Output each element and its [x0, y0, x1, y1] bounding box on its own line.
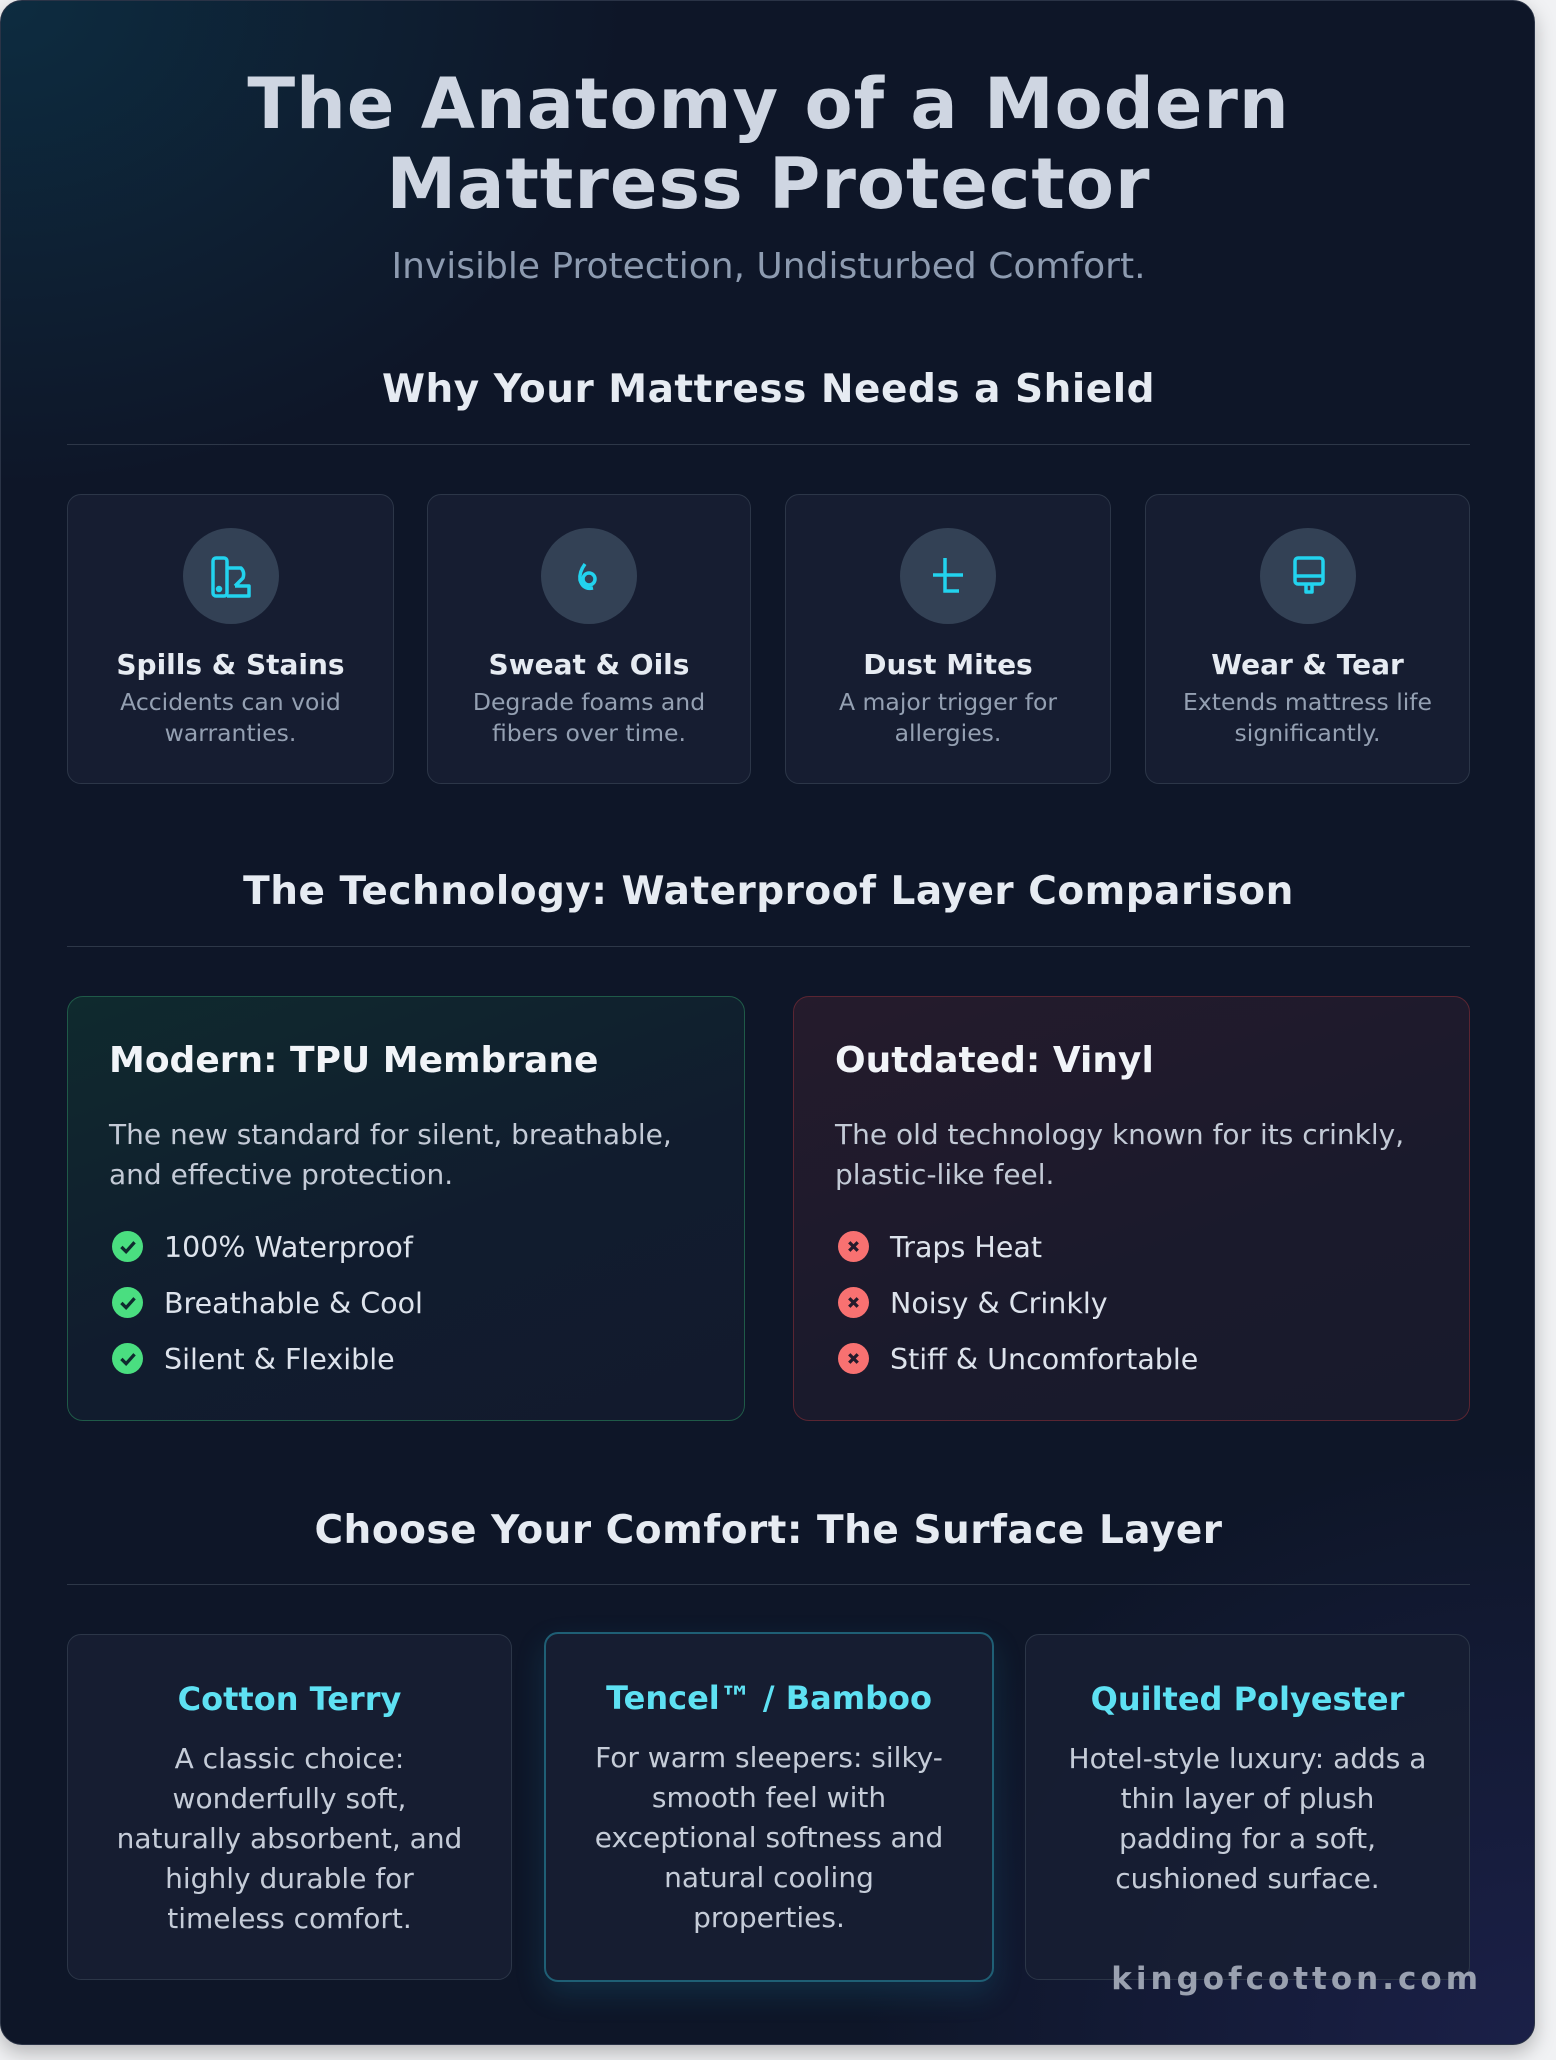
card: wear: significantly.	[1235, 719, 1380, 747]
card: sweat: Degrade foams and	[473, 688, 705, 716]
card: cotton terry: wonderfully soft,	[173, 1782, 406, 1815]
icon: monitor	[1260, 528, 1356, 624]
heading: technology: The Technology: Waterproof Layer Comparison	[243, 869, 1294, 914]
card: dust mites: allergies.	[895, 719, 1001, 747]
card: wear: Wear & Tear	[1211, 648, 1404, 681]
panel: TPU: and effective protection.	[109, 1158, 453, 1191]
heading: comfort: Choose Your Comfort: The Surface Layer	[314, 1508, 1223, 1553]
card: quilted: Hotel-style luxury: adds a	[1069, 1742, 1426, 1775]
list: TPU benefits: Silent & Flexible	[164, 1343, 395, 1376]
panel: TPU: The new standard for silent, breathable,	[109, 1118, 672, 1151]
title	[247, 63, 1290, 225]
card: quilted: padding for a soft,	[1119, 1822, 1376, 1855]
card: spills: Accidents can void	[120, 688, 341, 716]
heading: why: Why Your Mattress Needs a Shield	[382, 367, 1155, 412]
card: cotton terry: timeless comfort.	[167, 1902, 412, 1935]
card: wear: Extends mattress life	[1183, 688, 1432, 716]
panel: vinyl: plastic-like feel.	[835, 1158, 1054, 1191]
list: TPU benefits: 100% Waterproof	[164, 1231, 413, 1264]
card: wear	[1145, 494, 1470, 784]
card: tencel: Tencel™ / Bamboo	[606, 1679, 932, 1717]
card: cotton terry: highly durable for	[165, 1862, 414, 1895]
card: tencel: For warm sleepers: silky-	[595, 1741, 943, 1774]
card: tencel: exceptional softness and	[595, 1821, 943, 1854]
card: sweat	[427, 494, 751, 784]
card: quilted	[1025, 1634, 1470, 1980]
card: dust mites	[785, 494, 1111, 784]
card: cotton terry: naturally absorbent, and	[117, 1822, 462, 1855]
icon: spill	[182, 528, 278, 624]
list: vinyl drawbacks: Stiff & Uncomfortable	[890, 1343, 1198, 1376]
list: TPU benefits: Breathable & Cool	[164, 1287, 423, 1320]
list: vinyl drawbacks	[838, 1231, 1198, 1376]
card: sweat: fibers over time.	[492, 719, 686, 747]
panel: TPU	[67, 996, 745, 1421]
card: tencel: properties.	[693, 1901, 845, 1934]
card: quilted: thin layer of plush	[1121, 1782, 1374, 1815]
card: tencel: smooth feel with	[652, 1781, 886, 1814]
card: cotton terry: Cotton Terry	[178, 1680, 401, 1718]
list: TPU benefits	[112, 1231, 423, 1376]
card: cotton terry: A classic choice:	[175, 1742, 404, 1775]
title: Mattress Protector	[387, 143, 1150, 225]
subtitle: Invisible Protection, Undisturbed Comfort.	[391, 246, 1146, 287]
panel: vinyl: The old technology known for its crinkly,	[835, 1118, 1404, 1151]
panel: vinyl: Outdated: Vinyl	[835, 1040, 1154, 1081]
panel: vinyl	[793, 996, 1470, 1421]
card: spills: warranties.	[165, 719, 296, 747]
watermark: kingofcotton.com	[1111, 1961, 1482, 1997]
card: cotton terry	[67, 1634, 512, 1980]
card: spills	[67, 494, 394, 784]
card: tencel	[544, 1632, 994, 1982]
list: vinyl drawbacks: Traps Heat	[890, 1231, 1042, 1264]
icon: drop	[541, 528, 637, 624]
list: vinyl drawbacks: Noisy & Crinkly	[890, 1287, 1108, 1320]
card: quilted: cushioned surface.	[1115, 1862, 1380, 1895]
icon: plus	[900, 528, 996, 624]
title: The Anatomy of a Modern	[247, 63, 1290, 145]
card: spills: Spills & Stains	[116, 648, 345, 681]
card: dust mites: Dust Mites	[863, 648, 1033, 681]
panel: TPU: Modern: TPU Membrane	[109, 1040, 598, 1081]
card: dust mites: A major trigger for	[839, 688, 1057, 716]
card: sweat: Sweat & Oils	[489, 648, 689, 681]
card: quilted: Quilted Polyester	[1091, 1680, 1404, 1718]
card: tencel: natural cooling	[664, 1861, 874, 1894]
